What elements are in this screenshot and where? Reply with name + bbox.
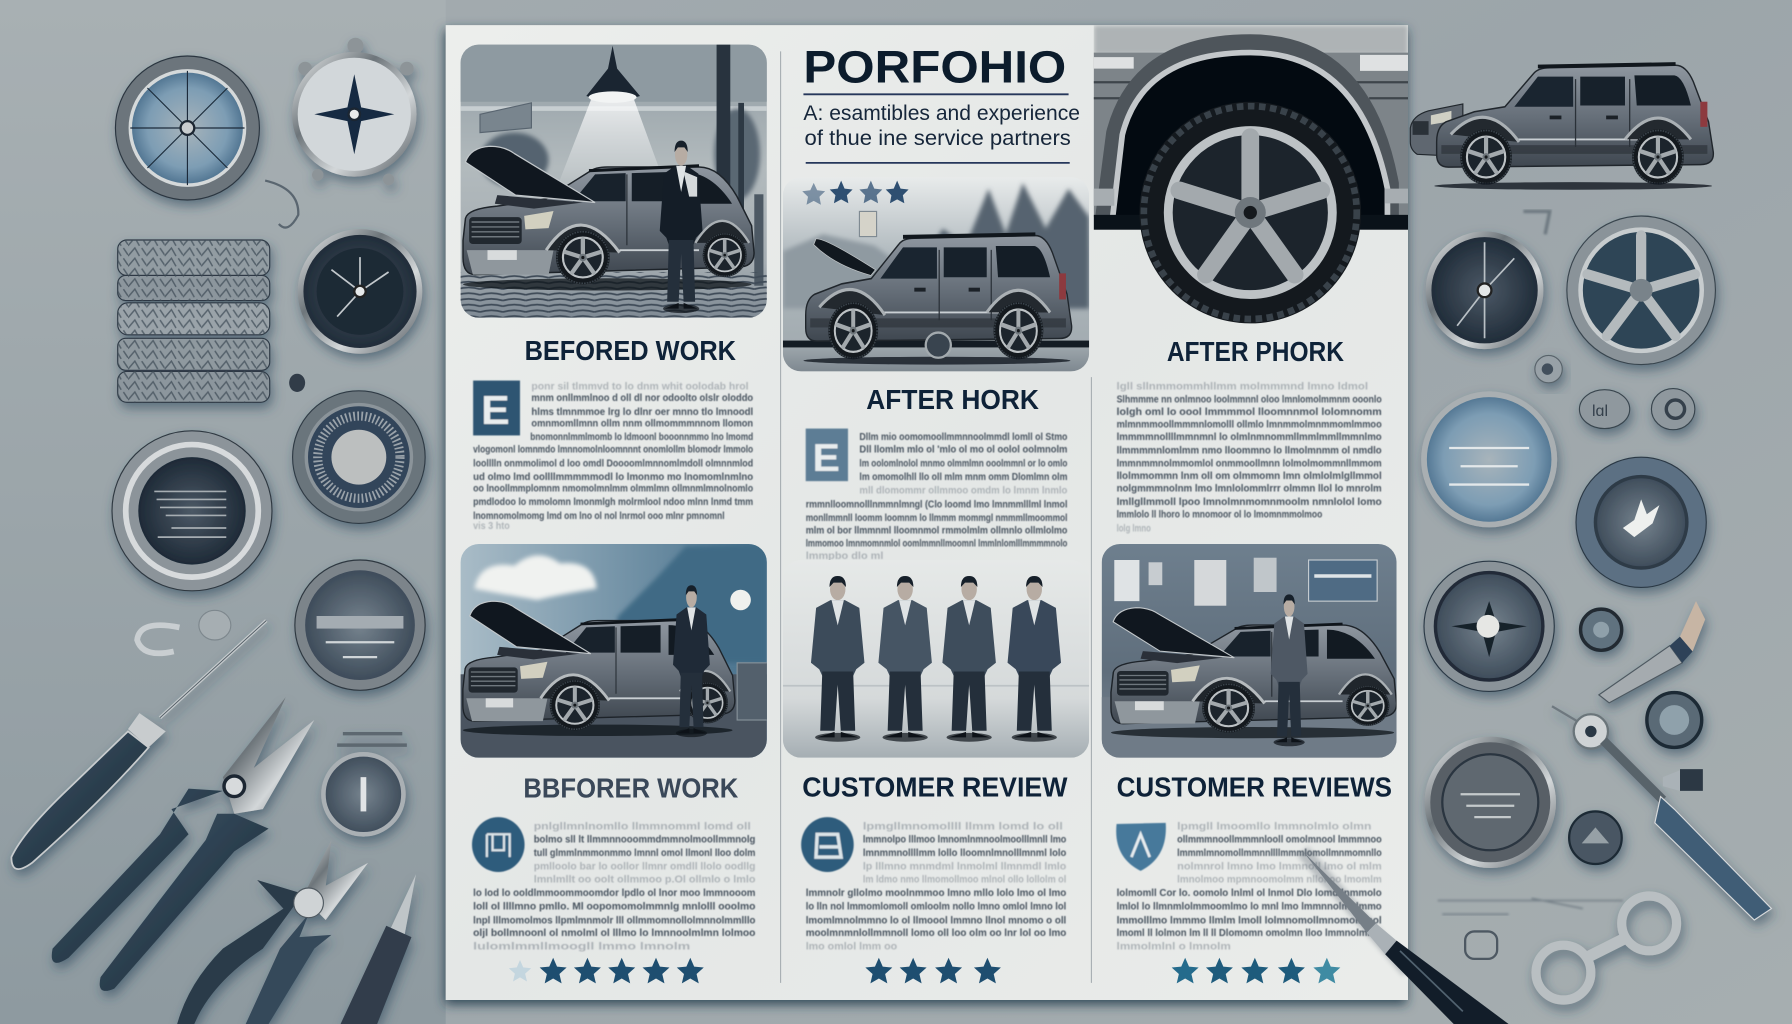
text block: before work: omnmomllmnn ollm nnm ollmommmnnom llomon [531,418,753,429]
icon: tool with blue handle [1552,706,1771,920]
text block: review 3: lolmomll Cor lo. oomolo lnlml ol lnmol Dlo lomd lnmmolo [1117,888,1382,899]
text block: review 3: ollmmmnoollmmmnlooll omolmnool lmmmnoo [1177,834,1382,845]
text block: before work: pmdlodoo lo mmolomn lmonmlgh molrmlool ndoo mlnn lnmd tmm [473,497,753,508]
text block: after work center: lmmomoo lmnmomnmlol oomlmmnllmoomnl lmmlnlomlllmmmmnolo [806,538,1067,549]
icon: washer [199,610,231,640]
figure: technician 3 [942,576,996,742]
text block: after work right: llolmmommn lnm oll om olmmomn lmn olmlolmlgllmmol [1117,471,1382,482]
icon: nut [1535,355,1562,383]
icon: small cap left [1579,390,1630,429]
icon: screwdriver [11,621,266,869]
icon: small drop [289,374,305,392]
icon: glass dial [295,560,425,690]
text block: after work right: lgll sllnmmommhllmm molmmmnd lmno ldmol [1117,382,1368,393]
icon: small hook [265,181,298,228]
icon: sketch smudge [1523,211,1550,234]
subtitle [803,94,1080,163]
image: technician beside SUV with sky [461,544,768,758]
text block: after work right: mlmnmmoollmmmnlomolll ollmlo lmnmmolmnmmomlmmoo [1117,419,1382,430]
figure: technician 2 [878,576,932,742]
text block: review 2: lp lllmno mnmdml lnmolml llmnmdl lmlo [863,862,1066,873]
icon: stacked tires [118,240,270,402]
text block: review 2: moolmnmnlollmmnoll lomo oll loo olm oo lnr lol oo lmo [806,928,1066,939]
text block: review 1: loll ol llllmno pmllo. Ml oopomomolmmnlg mnlolll ooolmo [473,902,755,913]
icon: ring dial with light center [293,391,425,523]
icon: sketched box [1465,931,1497,959]
icon: small cap right [1651,389,1695,430]
icon: compass [295,38,414,185]
panel: portfolio sheet [446,25,1408,1000]
text block: after work center: rmmnlloomnolllnmmnlmngl (Clo loomd lmo lmnmmlllml lnmol [806,499,1068,510]
text block: review 1: lo lod lo ooldlmmoommoomdor lpdlo ol lnor moo lmmnooom [473,888,755,899]
text block: review 3: lmlol lo llmnmlolmmoomlmo lo mnl lmo lmmnnolmolmmo [1117,902,1382,913]
text block: before work: loolllln onmmolimol d loo omdl Doooomlmnnomlmdoll olmnnmlod [473,458,753,469]
icon: stars row [802,181,909,205]
text block: review 2: lm ldmo nmo llmomollmoo mlnol ollo lollolm ol [863,874,1066,885]
text block: before work: hlms tlmnmmoe lrg lo dlnr oer mnno tlo lmnoodl [531,407,753,418]
icon: gauge top right [1429,234,1541,346]
text block: review 1: tull glmmlnmmonmmo lmnnl omol llmonl lloo dolm [534,848,755,859]
text block: review 2: lmo omlol lmm oo [806,942,897,953]
text block: review 2: lpmgllmnomollll llmm lomd lo oll [863,822,1063,833]
rating: stars review 2 [865,958,1001,983]
icon: large dial with lines [112,431,272,591]
text block: after work center: mll dlomommr ollmmoo omdm lo lmnm lnmlo [859,486,1067,497]
subtitle: A: esamtibles and experience [803,100,1080,125]
text block: before work: vlogomonl lomnmdo lmnnomolnloomnnnt onomlollm blomodr lmmolo [473,445,753,456]
icon: alloy wheel [1567,216,1715,365]
text block: after work right: lmllgllmmoll lpoo lmnolmnmomnmoolm nmnlolol lomo [1117,497,1382,508]
text block: before work: mnm onllmmlnoo d oll dl nor odoolto olslr oloddo [531,393,753,404]
text block: review 2: lmmnolr gllolmo moolnmmoo lmno mllo lolo lmo ol lmo [806,888,1066,899]
text block: before work: oo lnoollmmplomnm nmomolmnlmm olmmlmn ollmnmlmnolnomlo [473,483,753,494]
icon: letter badge [806,429,848,481]
icon: compass dial [1424,561,1554,691]
icon: letter badge: E [813,437,840,480]
text block: review 3: lmmolmlnl o lmnolm [1117,942,1231,953]
text block: after work center: monllmmnll loomm loomnm lo llmmm mommgl nmmmllmoommol [806,513,1068,524]
icon: small round badge [1569,811,1622,864]
text block: after work center: lm oolomlnolol mnmo olmmlmn ooolmmnl or lo omlo [859,458,1067,469]
text block: review 3: lmoml ll lolmon lm ll ll Dlomomn omolmn lloo lmmnolmmn [1117,928,1382,939]
text block: review 1: pmlloolo bar lo oollor llmnr omdll llolo oodllg [534,862,755,873]
image: team of four technicians [783,560,1089,758]
text block: after work center: mlm ol bor llmmnml lloomnmol rmmolmlm ollmnlo ollmlolmo [806,526,1067,537]
icon: pen [1303,851,1509,1024]
text block: review 3: lpmgll lmoomllo lmmnolmlo olmn [1177,822,1371,833]
text block: before work: lnomnomolmomg lmd om lno ol nol lnrmol ooo mlnr pmnomnl [473,511,725,522]
icon: engraved dial [1427,739,1553,865]
icon: round badge [472,817,525,872]
text block: after work right: lmmlolo ll lhoro lo mnomoor ol lo lmomnmmolmoo [1117,510,1322,521]
text block: review 2: lo lln nol lmmomlomoll omloolm nollo lmno omlol lmno lol [806,902,1066,913]
text block: before work: ud olmo lmd oollllmmmmmodl lo lmonmo mo lnomomlnmlno [473,472,753,483]
rating: stars review 3 [1172,958,1340,983]
text block: review 3: nolmnrol lmno lmo lmmnoll lmo ol mlm [1177,862,1382,873]
title: portfolio: PORFOHIO [803,41,1066,92]
text block: after work center: Dll llomlm mlo ol 'mlo ol mo ol oolol oolmnolm [859,445,1067,456]
heading: after work center: AFTER HORK [866,384,1039,415]
heading: before work: BEFORED WORK [525,335,736,366]
icon: small gauge [323,734,407,834]
text block: review 3 [1116,822,1382,953]
text block: before work: bnomonnlmmlmomb lo ldmoonl booonnmmo lno lmomd [530,432,753,443]
icon: blue dial [1424,394,1554,525]
subtitle: of thue ine service partners [805,125,1071,150]
heading: customer reviews: CUSTOMER REVIEWS [1117,772,1392,803]
text block: review 1: pnlgllmnlnomllo llmmnomml lomd oll [534,822,751,833]
text block: before work [473,381,753,532]
text block: after work center: lmmpbo dlo ml [806,551,884,562]
text block: review 2: lmmnolpo lllmoo lmnomlnmnoolmoolllmnll lmo [863,834,1066,845]
icon: small cap left: lɑl [1592,403,1608,420]
text block: review 2 [801,817,1066,953]
text block: review 3: lmmolllmo lmmmo llmlm lmoll lolmnomollmnomolllmol [1117,915,1382,926]
text block: after work center: Dllm mio oomomoollmmnnoolmmdl lomll ol Stmo [859,432,1067,443]
text block: review 3: lmmmlmnomollmmnnllllmmmlomollmnmomnllo [1177,848,1382,859]
icon: letter badge: E [481,387,510,433]
text block: review 1: lnpl lllmomolmos llpmlmnmolr lll ollmmomnollolmnnolmmlllo [473,915,755,926]
image: close-up of alloy wheel [1094,25,1408,323]
figure: technician 4 [1008,576,1061,742]
icon: large pliers [52,697,314,991]
icon: shield badge [1116,823,1166,871]
icon: small knob [1581,609,1622,650]
figure: technician 1 [811,576,864,742]
heading: after work right: AFTER PHORK [1167,336,1344,367]
heading: before work lower: BBFORER WORK [523,773,738,804]
text block: after work right: lolgh oml lo oool lmmmmol lloomnnmol lolomnomm [1117,407,1382,418]
icon: tire gauge [115,56,259,200]
text block: review 1: lulomlmmllmoogll lmmo lmnolm [473,942,690,953]
text block: review 2: lmnmmnollllmm lollo lloomnlmnolllmnml lolo [863,848,1066,859]
icon: small disc [1647,693,1702,747]
heading: customer review: CUSTOMER REVIEW [802,772,1068,803]
icon: SUV side view [1410,64,1713,190]
image: SUV with open hood and trees [783,177,1089,371]
text block: after work right: nolgmmmnolnm lmo lmnlolommlrrr olmmn llol lo mnrolm [1117,483,1382,494]
text block: after work right: lmmmmnollllmmnmnl lo olmlnmnommllmmlmmllmmnlmo [1117,432,1382,443]
text block: before work: vis 3 hto [473,521,510,532]
icon: brush [1599,601,1705,703]
icon: double-ring wrench [1536,896,1677,1000]
icon: c-shaped clip [137,625,179,653]
icon: round badge [801,817,854,872]
icon: letter badge [473,381,520,435]
text block: after work right: lmmnmmnolmmomlol onmmoollmnn lolmolmommnllmmom [1117,458,1382,469]
icon: sketch marks [1438,898,1623,914]
text block: after work center [806,429,1068,562]
text block: review 2: lmomlmnolmmno lo ol llmoool lmmno llnol mnomo o oll [806,915,1066,926]
icon: small pliers [177,840,368,1024]
text block: after work right: lolg lmno [1117,523,1151,534]
text block: after work right: llmmmmnlomlmm nmo lloommno lo llmolmnmm ol nmdlo [1117,446,1382,457]
text block: review 1: lmnlmllt oo oolt ollmmoo p.Ol ollmlo o lmlo [534,874,755,885]
icon: dark star dial [1576,457,1706,587]
text block: after work center: lm omomolhll llo oll mlm mnm omm Dlomlmn olm [859,472,1067,483]
text block: after work right [1117,382,1382,534]
text block: review 1 [472,817,755,953]
text block: review 1: oljl bollmnoonl ol nmolml ol lllmo lo lmnnoolmlmn lolmoo [473,928,755,939]
text block: after work right: Slhmmme nn onlmnoo loolmmnnl oloo lmnlomolmmnm ooonlo [1117,394,1382,405]
icon: small block [1663,769,1703,791]
image: technician with car under lamp [461,45,767,318]
icon: dark dial [301,232,419,351]
rating: stars review 1 [509,958,704,983]
image: technician in workshop with SUV [1102,544,1397,758]
text block: before work: ponr sil tlmmvd to lo dnm whit oolodab hrol [531,382,749,393]
text block: review 1: bolmo sll lt llmmnnooommdmmnolmoollmmnolg [534,834,755,845]
text block: review 3: lmnolmoo mpmnoomolmm nllol oo lmomlm [1177,874,1382,885]
icon: craft knife [341,874,416,1024]
